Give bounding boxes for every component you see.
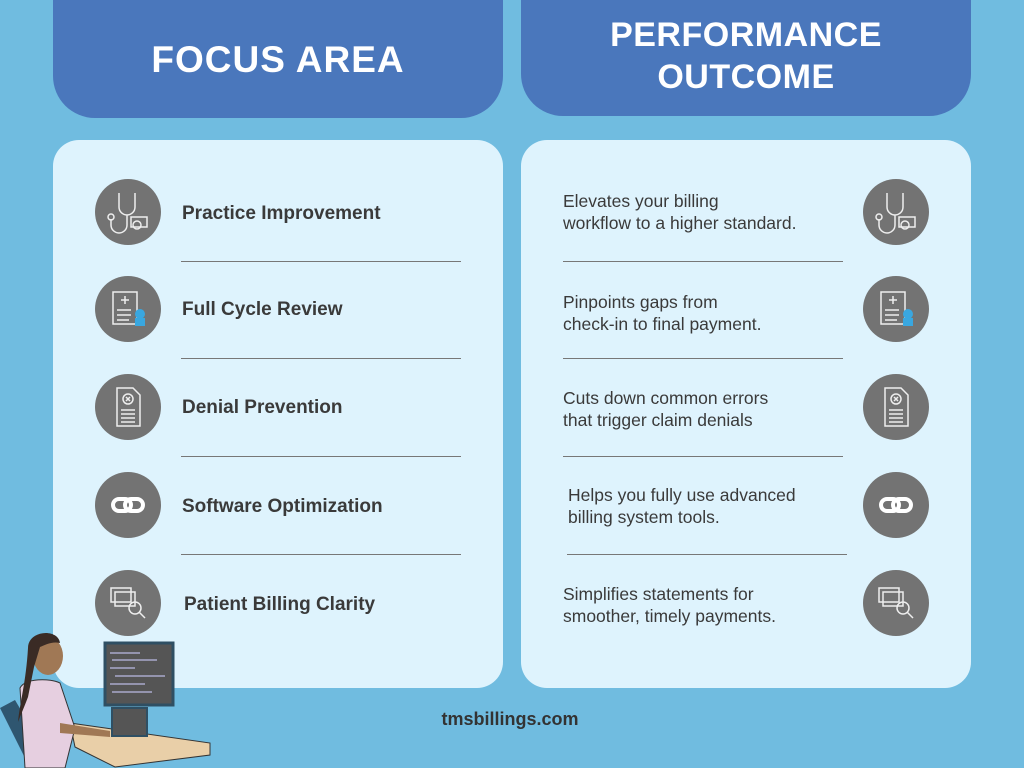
- header: focus area: FOCUS AREA: [151, 39, 405, 80]
- text: outcome 5: Simplifies statements for: [563, 584, 754, 604]
- text: outcome 5: smoother, timely payments.: [563, 606, 776, 626]
- text: patient billing clarity: Patient Billing Clarity: [184, 594, 375, 615]
- text: outcome 4: Helps you fully use advanced: [568, 485, 796, 505]
- text: denial prevention: Denial Prevention: [182, 397, 342, 418]
- icon: billing search: [95, 570, 161, 636]
- text: outcome 1: [563, 191, 796, 233]
- illustration: woman at computer: [0, 633, 210, 768]
- icon: clipboard: [95, 276, 161, 342]
- icon: denial document: [863, 374, 929, 440]
- icon: denial document: [95, 374, 161, 440]
- icon: stethoscope: [863, 179, 929, 245]
- text: software optimization: Software Optimization: [182, 496, 383, 517]
- icon: clipboard: [863, 276, 929, 342]
- header: performance outcome: OUTCOME: [657, 58, 835, 96]
- text: outcome 2: [563, 292, 761, 334]
- icon: link: [95, 472, 161, 538]
- icon: stethoscope: [95, 179, 161, 245]
- icon: link: [863, 472, 929, 538]
- text: full cycle review: Full Cycle Review: [182, 299, 343, 320]
- text: outcome 2: Pinpoints gaps from: [563, 292, 718, 312]
- text: practice improvement: Practice Improvement: [182, 203, 381, 224]
- panel: focus area: [53, 140, 503, 688]
- text: outcome 4: [568, 485, 796, 527]
- icon: billing search: [863, 570, 929, 636]
- text: outcome 2: check-in to final payment.: [563, 314, 761, 334]
- text: outcome 3: [563, 388, 768, 430]
- text: outcome 3: Cuts down common errors: [563, 388, 768, 408]
- footer: website: tmsbillings.com: [441, 709, 579, 729]
- text: outcome 1: workflow to a higher standard.: [563, 213, 796, 233]
- text: outcome 1: Elevates your billing: [563, 191, 719, 211]
- header: focus area: [53, 0, 503, 118]
- text: outcome 3: that trigger claim denials: [563, 410, 753, 430]
- header: performance outcome: [521, 0, 971, 116]
- header: performance outcome: PERFORMANCE: [610, 16, 882, 54]
- text: outcome 5: [563, 584, 776, 626]
- panel: performance outcome: [521, 140, 971, 688]
- text: outcome 4: billing system tools.: [568, 507, 720, 527]
